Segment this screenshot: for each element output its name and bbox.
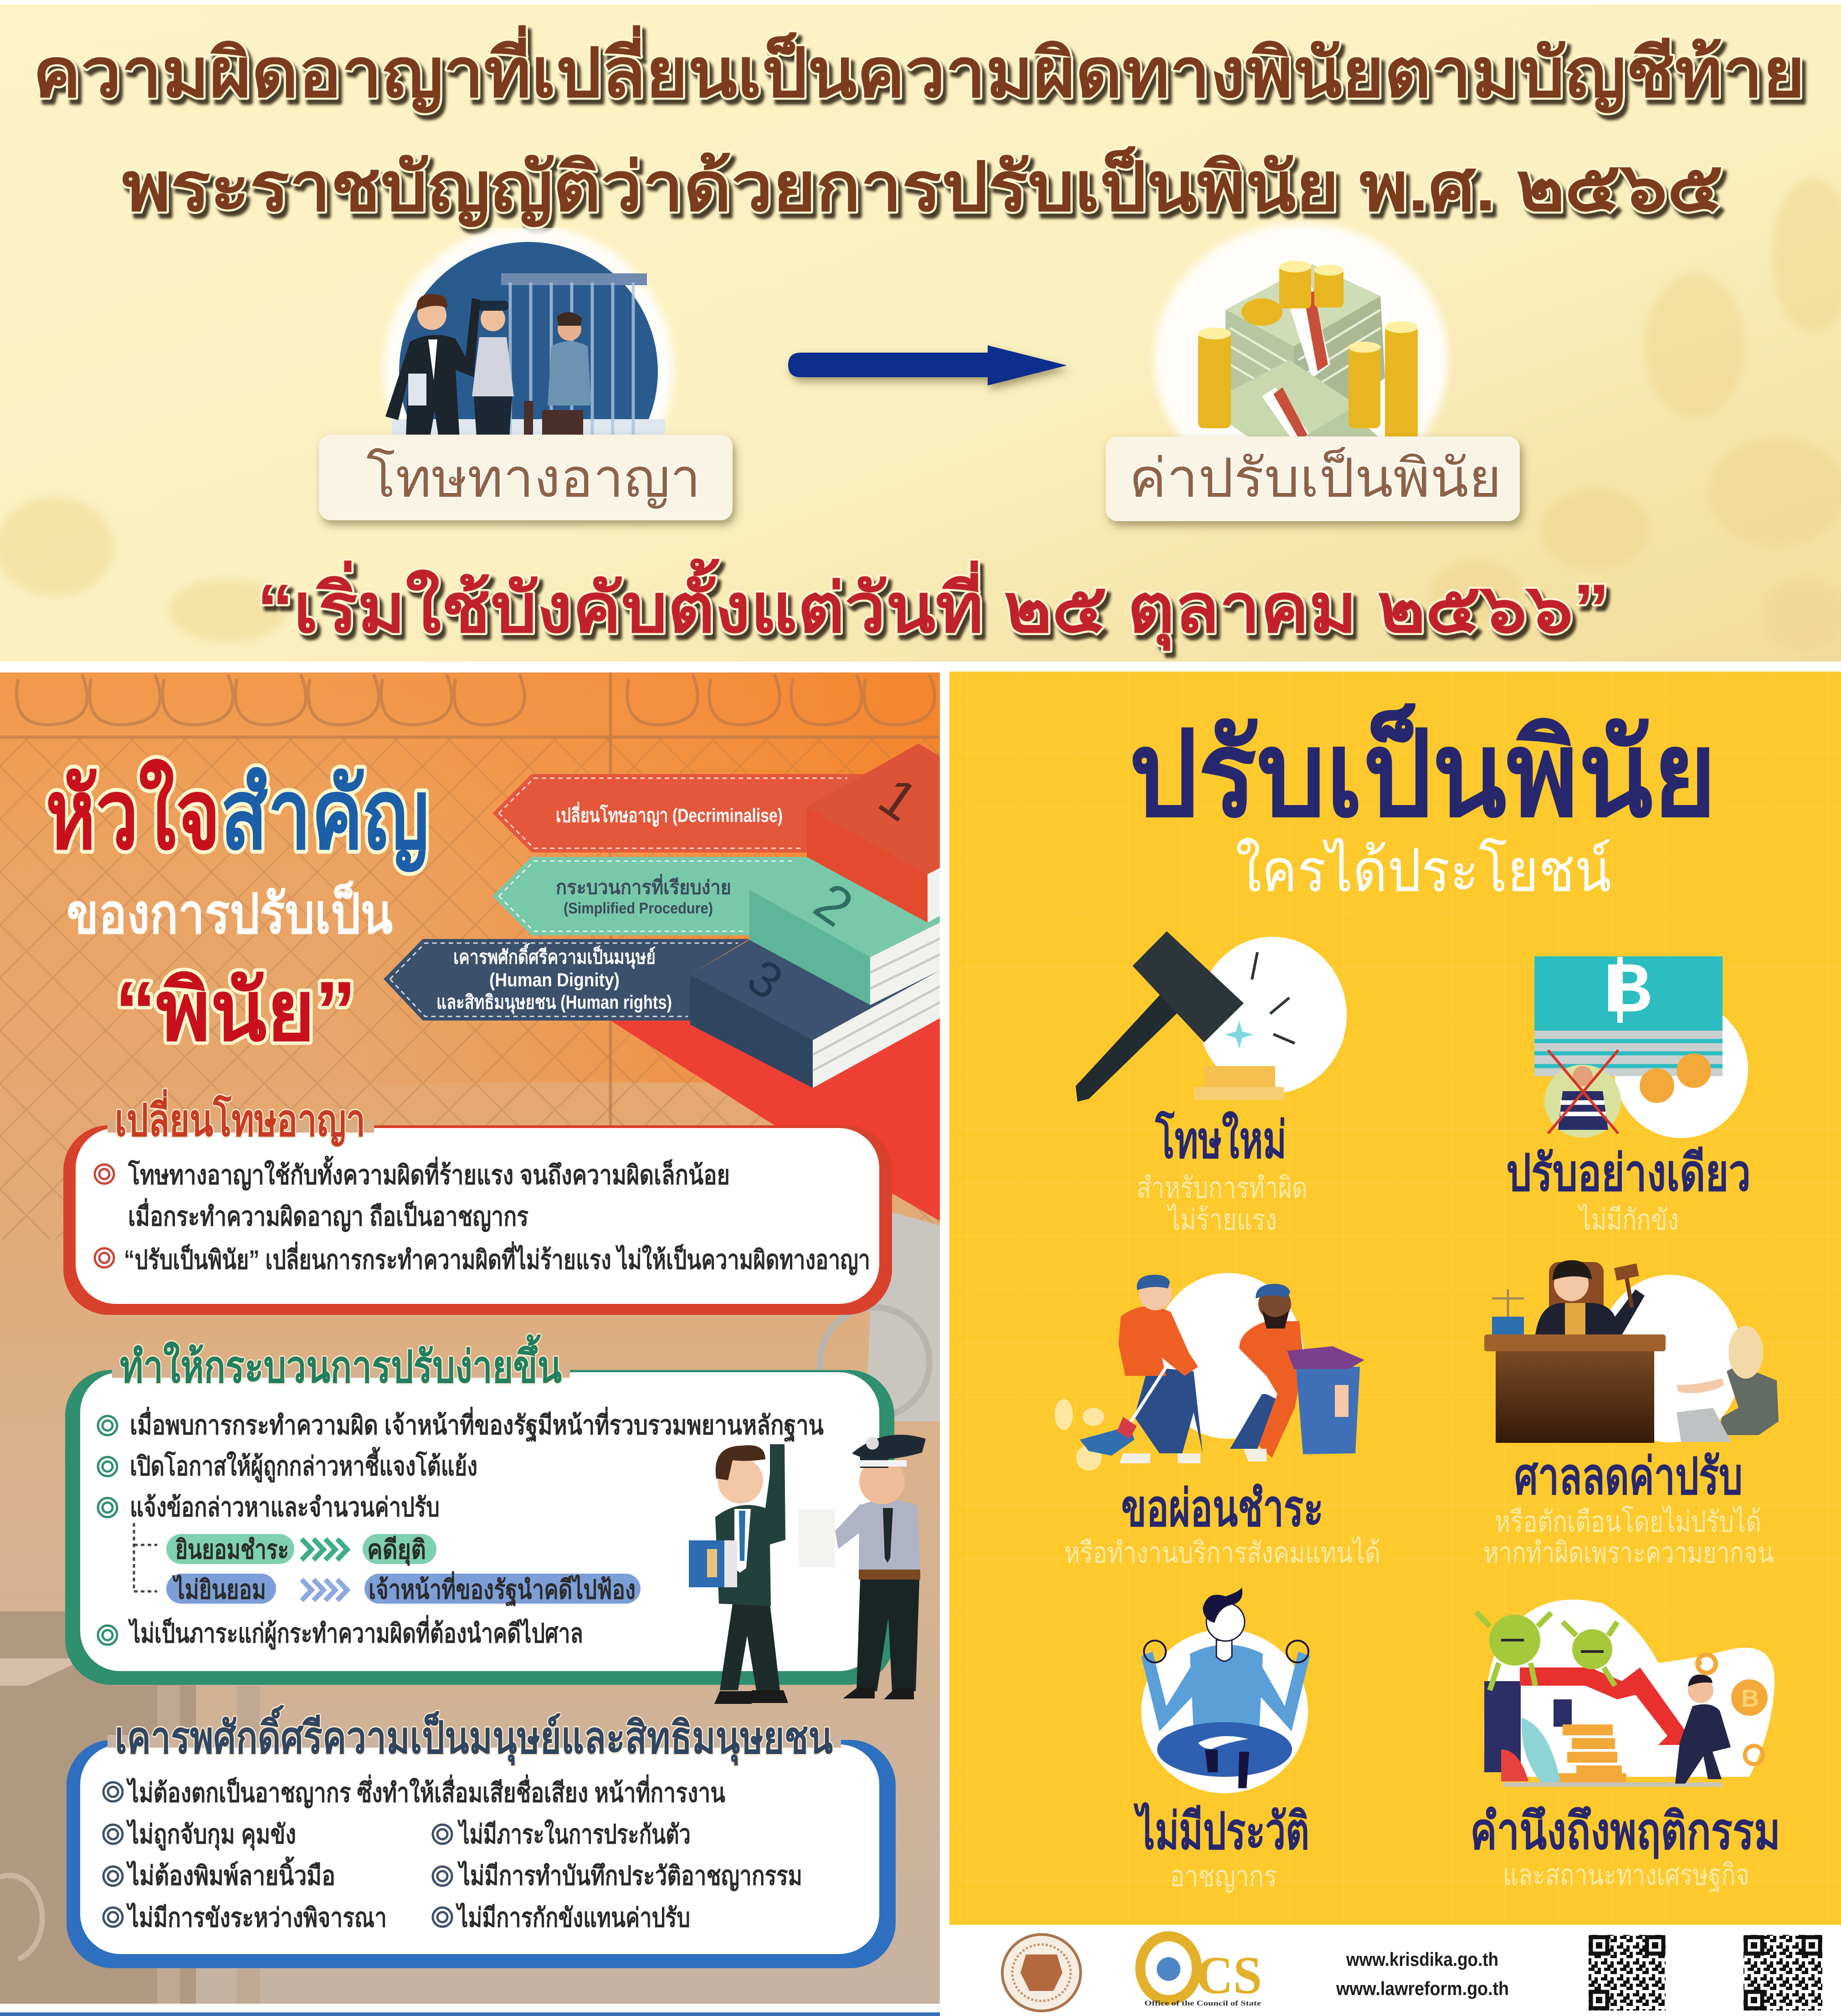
text: dignity points: ไม่มีการขังระหว่างพิจารณา: [126, 1903, 387, 1933]
bullet icon: [95, 1164, 114, 1267]
text: procedure points: ไม่เป็นภาระแก่ผู้กระทำความผิดที่ต้องนำคดีไปศาล: [128, 1615, 583, 1650]
item: pay in instalments: ขอผ่อนชำระ: [1121, 1480, 1323, 1537]
title: two lines: พระราชบัญญัติว่าด้วยการปรับเป็นพินัย พ.ศ. ๒๕๖๕: [122, 146, 1723, 227]
text: decriminalise points: “ปรับเป็นพินัย” เปลี่ยนการกระทำความผิดที่ไม่ร้ายแรง ไม่ให้เป็นความผิดทางอาญา: [124, 1241, 870, 1275]
tag: simplified procedure: (Simplified Procedure): [564, 900, 713, 917]
bottom blue strip: [0, 2012, 940, 2016]
flow: refuse path: [166, 1571, 641, 1607]
heading: simplified procedure: ทำให้กระบวนการปรับง่ายขึ้น: [120, 1334, 562, 1392]
item: behaviour and economy: [1470, 1803, 1780, 1893]
text: procedure points: [128, 1406, 824, 1650]
subtitle: who benefits: ใครได้ประโยชน์: [1236, 837, 1611, 904]
text: decriminalise points: [124, 1156, 870, 1275]
tag: decriminalise: [492, 774, 866, 852]
text: decriminalise points: โทษทางอาญาใช้กับทั้งความผิดที่ร้ายแรง จนถึงความผิดเล็กน้อย: [128, 1156, 730, 1190]
item: new penalty: โทษใหม่: [1155, 1111, 1287, 1169]
book 2: 2: [804, 871, 864, 939]
illustration: stack of three books: [690, 744, 940, 1088]
item: court reduces fine: หากทำผิดเพราะความยากจน: [1483, 1536, 1774, 1569]
logo: seal: [1002, 1934, 1081, 2011]
item: no record: ไม่มีประวัติ: [1133, 1802, 1309, 1860]
book 1: [807, 744, 940, 923]
illustration: citizen figure: [689, 1444, 788, 1704]
tag: simplified procedure: กระบวนการที่เรียบง่าย: [556, 874, 731, 898]
illustration: officer figure: [799, 1435, 926, 1699]
heading: phinai: “พินัย”: [115, 964, 356, 1058]
illustration: prison scene: [380, 228, 677, 435]
item: pay in instalments: หรือทำงานบริการสังคมแทนได้: [1064, 1536, 1380, 1569]
panel: who benefits: [949, 672, 1841, 1925]
label: criminal penalty: [319, 435, 733, 520]
icon: banknote and prisoner: B: [1604, 949, 1653, 1026]
icon: gavel: [1076, 931, 1347, 1102]
panel: heart of the fine system: [0, 672, 940, 2004]
QR code 2: [1744, 1935, 1822, 2011]
text: dignity points: ไม่มีภาระในการประกันตัว: [457, 1819, 691, 1849]
text: procedure points: เปิดโอกาสให้ผู้ถูกกล่าวหาชี้แจงโต้แย้ง: [130, 1447, 477, 1483]
item: fine only: ไม่มีกักขัง: [1577, 1203, 1679, 1236]
item: court reduces fine: หรือตักเตือนโดยไม่ปรับได้: [1495, 1505, 1761, 1538]
item: court reduces fine: [1483, 1448, 1774, 1569]
tag: decriminalise: เปลี่ยนโทษอาญา (Decriminalise): [556, 802, 783, 827]
book 2: [749, 857, 940, 1005]
flow: accept path: คดียุติ: [367, 1535, 426, 1566]
item: new penalty: สำหรับการทำผิด: [1137, 1171, 1308, 1204]
label: civil fine: [1106, 436, 1520, 521]
icon: judge and poor man: [1484, 1260, 1779, 1443]
text: dignity points: ไม่มีการกักขังแทนค่าปรับ: [455, 1903, 690, 1933]
arrow: penalty to fine: [788, 345, 1067, 385]
text: dignity points: ไม่ต้องตกเป็นอาชญากร ซึ่งทำให้เสื่อมเสียชื่อเสียง หน้าที่การงาน: [126, 1774, 725, 1808]
text: decriminalise points: เมื่อกระทำความผิดอาญา ถือเป็นอาชญากร: [128, 1198, 528, 1232]
flow: accept path: ยินยอมชำระ: [175, 1535, 289, 1565]
icon: banknote and prisoner: [1534, 949, 1748, 1138]
icon: meditating man: [1141, 1587, 1310, 1793]
panel: simplified procedure: [65, 1334, 894, 1685]
label: criminal penalty: โทษทางอาญา: [366, 448, 701, 509]
text: procedure points: แจ้งข้อกล่าวหาและจำนวนค่าปรับ: [130, 1493, 440, 1522]
text: dignity points: ไม่ถูกจับกุม คุมขัง: [126, 1819, 296, 1851]
tag: human dignity: [384, 939, 749, 1021]
item: new penalty: ไม่ร้ายแรง: [1166, 1203, 1277, 1236]
text: procedure points: เมื่อพบการกระทำความผิด เจ้าหน้าที่ของรัฐมีหน้าที่รวบรวมพยานหลักฐาน: [130, 1406, 824, 1442]
title: two lines: [33, 25, 1805, 227]
text: dignity points: ไม่ต้องพิมพ์ลายนิ้วมือ: [126, 1857, 335, 1891]
title: fine as civil penalty: ปรับเป็นพินัย: [1129, 702, 1717, 841]
item: behaviour and economy: และสถานะทางเศรษฐกิจ: [1503, 1858, 1749, 1893]
item: pay in instalments: [1064, 1480, 1380, 1569]
panel: human dignity: [67, 1705, 896, 1968]
title: two lines: ความผิดอาญาที่เปลี่ยนเป็นความผิดทางพินัยตามบัญชีท้าย: [33, 25, 1805, 113]
links: websites: www.krisdika.go.th: [1346, 1949, 1498, 1970]
bullet icon: [103, 1782, 452, 1927]
item: fine only: [1506, 1144, 1751, 1236]
icon: economic downturn: B: [1741, 1685, 1759, 1712]
panel: decriminalise: [63, 1089, 892, 1315]
heading: heart of: [46, 759, 429, 872]
bullet icon: [98, 1416, 117, 1645]
logo: OCS: [1140, 1936, 1262, 2007]
flow: accept path: [134, 1523, 436, 1591]
item: court reduces fine: ศาลลดค่าปรับ: [1514, 1448, 1743, 1505]
icon: economic downturn: [1476, 1600, 1774, 1787]
heading: human dignity: เคารพศักดิ์ศรีความเป็นมนุษย์และสิทธิมนุษยชน: [115, 1705, 833, 1766]
item: fine only: ปรับอย่างเดียว: [1506, 1144, 1751, 1201]
footer: logos and links: [949, 1925, 1841, 2016]
tag: human dignity: และสิทธิมนุษยชน (Human rights): [436, 991, 672, 1014]
tag: simplified procedure: [492, 857, 804, 935]
book 3: [690, 920, 940, 1088]
heading: decriminalise: เปลี่ยนโทษอาญา: [115, 1089, 365, 1147]
heading: heart of: สำคัญ: [221, 759, 429, 872]
flow: refuse path: ไม่ยินยอม: [172, 1575, 266, 1605]
tag: human dignity: เคารพศักดิ์ศรีความเป็นมนุษย์: [453, 943, 656, 969]
icon: community service workers: [1055, 1273, 1364, 1471]
heading: heart of: หัวใจ: [46, 759, 221, 869]
links: websites: [1336, 1949, 1509, 1999]
item: new penalty: [1137, 1111, 1308, 1236]
QR code 1: [1589, 1935, 1666, 2011]
item: no record: [1133, 1802, 1309, 1893]
logo: OCS: CS: [1196, 1945, 1262, 2005]
label: civil fine: ค่าปรับเป็นพินัย: [1129, 446, 1502, 508]
book 1: 1: [868, 765, 928, 833]
tag: human dignity: (Human Dignity): [489, 969, 620, 990]
logo: OCS: Office of the Council of State: [1144, 2000, 1261, 2007]
book 3: 3: [738, 949, 793, 1011]
heading: of the fine: ของการปรับเป็น: [67, 881, 393, 945]
slogan: effective date: “เริ่มใช้บังคับตั้งแต่วันที่ ๒๕ ตุลาคม ๒๕๖๖”: [257, 558, 1610, 651]
text: dignity points: ไม่มีการทำบันทึกประวัติอาชญากรรม: [457, 1861, 802, 1891]
illustration: money pile: [1154, 223, 1448, 497]
text: dignity points: [126, 1774, 802, 1933]
flow: refuse path: เจ้าหน้าที่ของรัฐนำคดีไปฟ้อง: [369, 1571, 636, 1607]
item: no record: อาชญากร: [1170, 1860, 1277, 1893]
panel: top banner: [0, 5, 1841, 662]
links: websites: www.lawreform.go.th: [1336, 1978, 1509, 1999]
